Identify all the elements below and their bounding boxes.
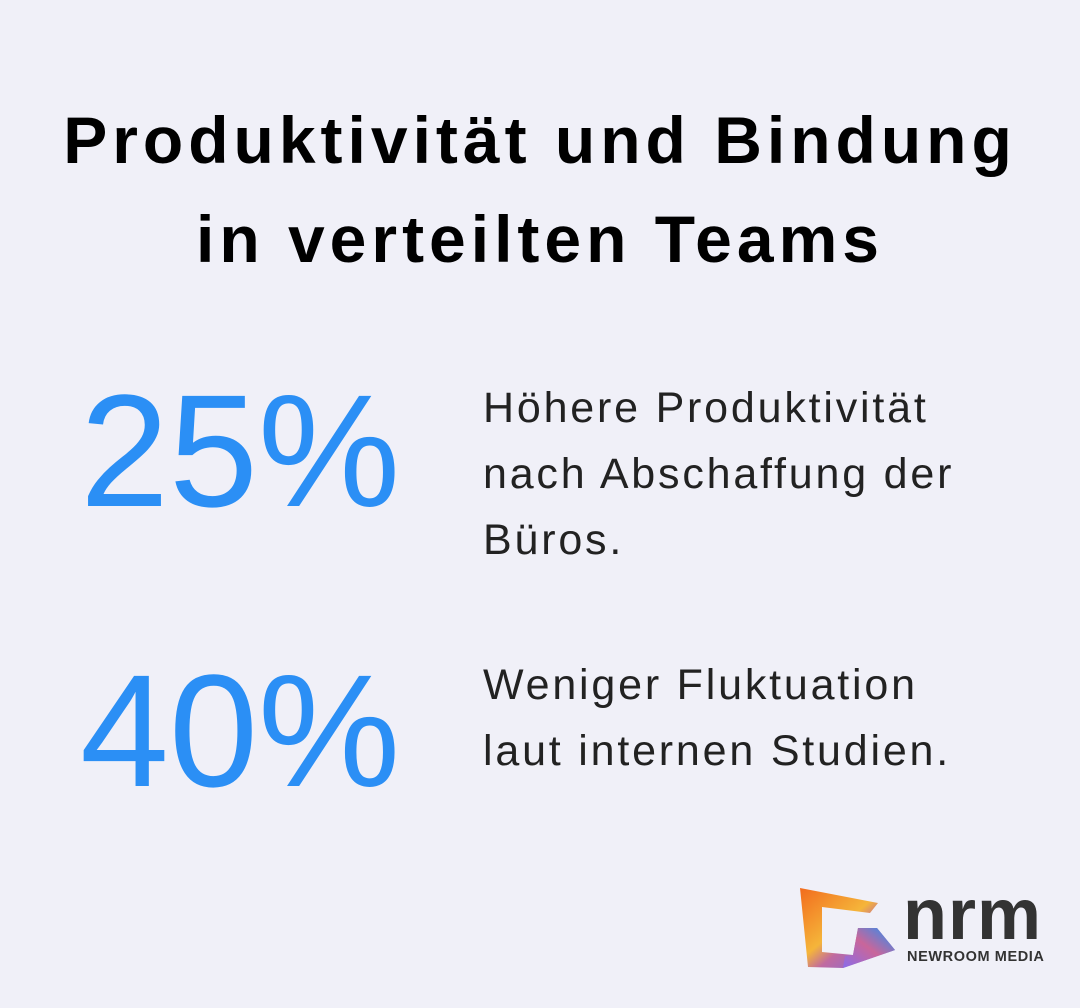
title: Produktivität und Bindung	[63, 103, 1017, 177]
logo text: nrm	[903, 875, 1042, 955]
stat: 25%: 25%	[80, 361, 400, 540]
description: 25%	[483, 384, 954, 564]
logo: nrm newroom media: NEWROOM MEDIA	[907, 949, 1044, 965]
description: 40%	[483, 661, 951, 775]
stat: 40%: 40%	[80, 641, 400, 820]
description: 40%: Weniger Fluktuation	[483, 661, 918, 709]
title	[63, 103, 1017, 276]
description: 25%: nach Abschaffung der	[483, 450, 954, 498]
description: 25%: Büros.	[483, 516, 624, 564]
description: 25%: Höhere Produktivität	[483, 384, 929, 432]
description: 40%: laut internen Studien.	[483, 727, 951, 775]
logo: nrm newroom media	[800, 875, 1044, 968]
title: in verteilten Teams	[196, 202, 884, 276]
